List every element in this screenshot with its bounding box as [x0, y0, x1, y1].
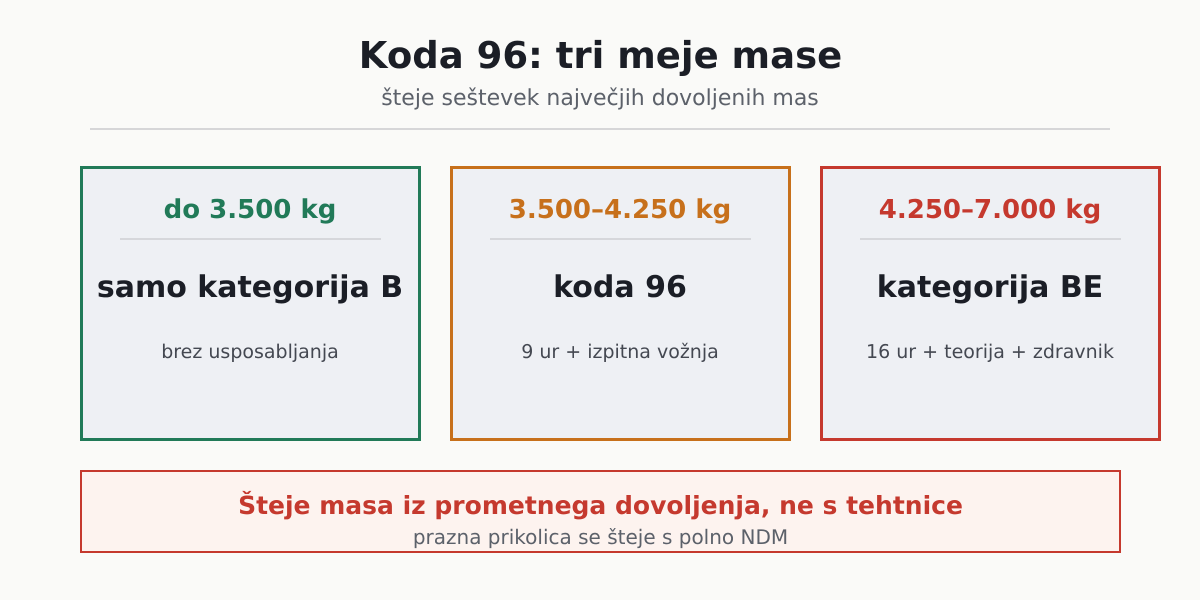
mass range: 3.500–4.250 kg	[509, 195, 731, 225]
requirement: 9 ur + izpitna vožnja	[521, 341, 719, 363]
category: samo kategorija B	[97, 270, 403, 305]
panel: 3.500–4.250 kg	[452, 168, 790, 440]
mass range: 4.250–7.000 kg	[879, 195, 1101, 225]
callout	[81, 471, 1120, 552]
requirement: brez usposabljanja	[161, 341, 339, 363]
callout heading: Šteje masa iz prometnega dovoljenja, ne s tehtnice	[238, 490, 963, 520]
mass range: do 3.500 kg	[164, 195, 336, 225]
title: Koda 96: tri meje mase	[359, 34, 842, 77]
panel: 4.250–7.000 kg	[822, 168, 1160, 440]
panel: do 3.500 kg	[82, 168, 420, 440]
category: kategorija BE	[877, 270, 1103, 305]
subtitle: šteje seštevek največjih dovoljenih mas	[381, 86, 819, 111]
category: koda 96	[553, 270, 687, 305]
requirement: 16 ur + teorija + zdravnik	[866, 341, 1114, 363]
callout note: prazna prikolica se šteje s polno NDM	[413, 525, 788, 549]
